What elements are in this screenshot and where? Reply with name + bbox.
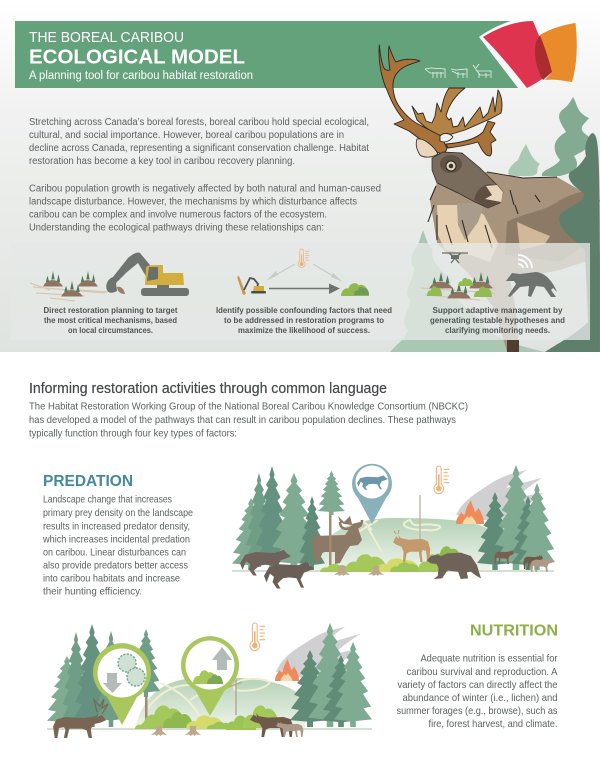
deer (393, 530, 430, 562)
caribou head (416, 139, 503, 208)
intro paragraph 2: caribou can be complex and involve numerous factors of the ecosystem. (29, 210, 327, 220)
caption: direct restoration: Direct restoration planning to target (44, 305, 178, 315)
illustration: predation forest scene (232, 464, 555, 589)
title block: THE BOREAL CARIBOU (29, 29, 184, 46)
small caribou and moose cluster (494, 549, 554, 572)
text: predation: which increases incidental predation (42, 534, 190, 546)
bear (427, 553, 481, 579)
wildfire and smoke (456, 470, 543, 524)
caribou body (428, 172, 600, 352)
pale and mid background trees (390, 97, 591, 352)
caption: direct restoration (44, 305, 178, 335)
intro paragraph 1: decline across Canada, representing a significant conservation challenge. Habitat (29, 143, 369, 154)
intro paragraph 1 (29, 117, 369, 167)
intro paragraph 2 (29, 184, 381, 234)
caption: confounding factors (216, 305, 392, 335)
text: predation (42, 494, 193, 598)
caption: adaptive management: generating testable hypotheses and (430, 315, 565, 325)
text: predation: their hunting efficiency. (43, 586, 142, 598)
ground line (232, 570, 554, 572)
icon: thermometer (250, 623, 265, 651)
dark foreground tree (545, 133, 600, 352)
intro paragraph 1: cultural, and social importance. However, boreal caribou populations are in (29, 130, 344, 141)
heading: predation: PREDATION (43, 473, 133, 490)
hillside with roads (135, 678, 305, 728)
ground line (47, 728, 372, 730)
map pin: wolf (352, 464, 392, 524)
caption: adaptive management (430, 305, 565, 335)
title block (29, 29, 253, 82)
icon: drone and monitored wolf (421, 253, 557, 300)
caption: direct restoration: on local circumstances. (68, 325, 153, 335)
caribou antlers (379, 45, 502, 156)
intro paragraph 2: landscape disturbance. However, the mechanisms by which disturbance affects (29, 196, 357, 208)
intro paragraph 1: Stretching across Canada’s boreal forests, boreal caribou hold special ecological, (29, 117, 369, 128)
snag (226, 680, 242, 715)
moose (312, 516, 362, 564)
title block: ECOLOGICAL MODEL (29, 46, 245, 68)
pine with trunk (318, 471, 345, 565)
text: nutrition: abundance of winter (i.e., lichen) and (402, 693, 558, 704)
icon: thermometer (434, 466, 449, 494)
caption: adaptive management: clarifying monitoring needs. (445, 325, 550, 335)
text: nutrition: Adequate nutrition is essential for (420, 654, 558, 664)
caption: confounding factors: to be addressed in restoration programs to (224, 315, 384, 325)
caption: confounding factors: maximize the likelihood of success. (238, 325, 370, 335)
map pin: browse increasing (181, 636, 239, 716)
text: nutrition: variety of factors can directly affect the (398, 680, 558, 691)
text: predation: also provide predators better access (43, 560, 188, 572)
left trees (47, 624, 160, 727)
header background (0, 0, 600, 352)
stumps (151, 726, 201, 736)
wildfire and smoke (275, 627, 360, 681)
intro paragraph 1: restoration has become a key tool in caribou recovery planning. (29, 156, 295, 167)
panel: benefits (11, 243, 590, 340)
illustration: nutrition forest scene (47, 623, 372, 738)
text: predation: on caribou. Linear disturbances can (43, 548, 186, 558)
section intro text (29, 402, 468, 440)
caribou left (53, 699, 108, 738)
text: predation: primary prey density on the landscape (43, 508, 193, 519)
stumps (334, 566, 384, 576)
wolves (240, 550, 314, 589)
text: nutrition (396, 654, 558, 730)
right trees (477, 465, 555, 570)
right trees (290, 623, 372, 727)
snag (419, 495, 421, 545)
section intro text: has developed a model of the pathways that can result in caribou population declines. These pathways (29, 415, 456, 426)
shrubs (320, 546, 462, 572)
pine trunk (145, 695, 148, 725)
icon: excavator and mounds (30, 253, 189, 301)
caribou right with calf (250, 713, 303, 737)
text: nutrition: fire, forest harvest, and climate. (428, 719, 558, 730)
section intro text: The Habitat Restoration Working Group of the National Boreal Caribou Knowledge Consortium (NBCKC) (29, 402, 468, 412)
caption: adaptive management: Support adaptive management by (432, 305, 563, 315)
banner (15, 21, 518, 88)
icon: confounding factors diagram (237, 249, 369, 296)
section intro text: typically function through four key types of factors: (29, 428, 237, 440)
caption: direct restoration: the most critical mechanisms, based (44, 315, 177, 325)
caption: confounding factors: Identify possible confounding factors that need (216, 305, 392, 315)
title block: A planning tool for caribou habitat restoration (29, 70, 253, 82)
left trees (232, 466, 325, 570)
section heading: Informing restoration activities through common language (29, 381, 387, 397)
map pin: lichen decreasing (93, 643, 151, 725)
heading: nutrition: NUTRITION (470, 622, 558, 640)
herd icons (425, 64, 491, 78)
text: predation: results in increased predator density, (43, 522, 190, 532)
hillside with roads (313, 518, 490, 570)
logo (483, 21, 577, 88)
intro paragraph 2: Caribou population growth is negatively affected by both natural and human-caused (29, 184, 381, 194)
text: nutrition: caribou survival and reproduction. A (406, 667, 558, 678)
text: predation: into caribou habitats and increase (43, 574, 180, 584)
text: predation: Landscape change that increases (43, 494, 172, 506)
text: nutrition: summer forages (e.g., browse), such as (396, 706, 558, 717)
shrubs (135, 705, 279, 730)
intro paragraph 2: Understanding the ecological pathways driving these relationships can: (29, 222, 324, 234)
